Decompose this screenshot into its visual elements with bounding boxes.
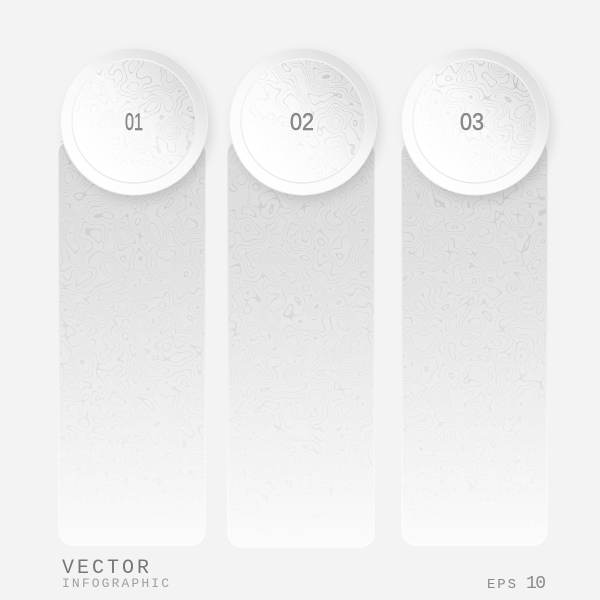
badge: circle 03 — [402, 48, 552, 200]
number 01: 01 — [125, 109, 143, 136]
pattern: disc 3 contour lines — [424, 60, 536, 172]
panel: column 3 — [402, 140, 547, 545]
title: VECTOR: VECTOR — [62, 557, 149, 580]
subtitle: INFOGRAPHIC: INFOGRAPHIC — [62, 576, 169, 591]
panel: column 1 — [59, 140, 205, 545]
label: EPS 10: EPS — [487, 577, 516, 593]
number 02: 02 — [290, 109, 314, 136]
label: EPS 10: 10 — [526, 574, 546, 594]
pattern: card 1 contour lines — [60, 141, 204, 430]
panel: column 2 — [228, 140, 374, 547]
badge: circle 02 — [230, 48, 380, 200]
pattern: card 3 contour lines — [403, 141, 546, 430]
pattern: card 2 contour lines — [229, 141, 373, 430]
pattern: disc 2 contour lines — [248, 60, 364, 172]
label: EPS 10 — [487, 574, 546, 594]
badge: circle 01 — [60, 48, 211, 200]
pattern: disc 1 contour lines — [78, 60, 195, 173]
number 03: 03 — [460, 109, 484, 136]
